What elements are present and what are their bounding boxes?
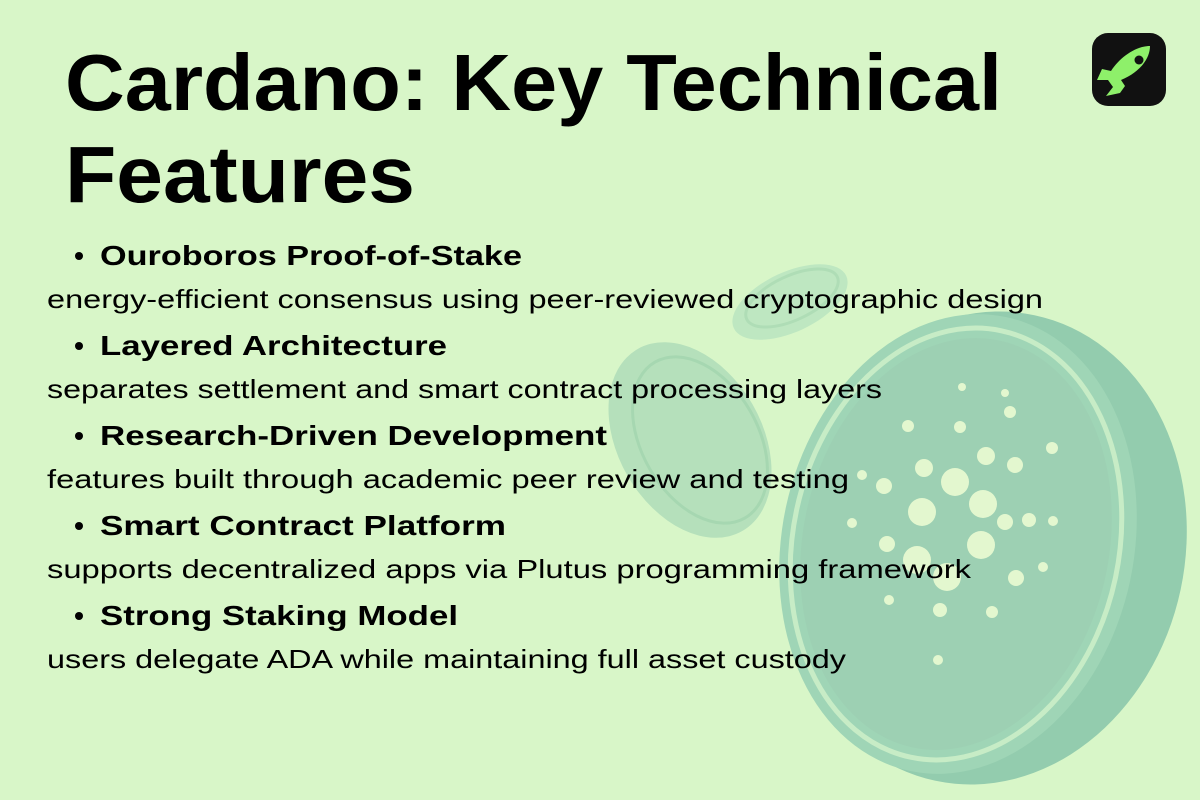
item 5: Strong Staking Model [100, 600, 458, 631]
item 1 [47, 240, 1043, 314]
item 3: features built through academic peer review and testing [47, 464, 849, 494]
logo: rocket icon [1092, 33, 1166, 106]
item 4: supports decentralized apps via Plutus programming framework [47, 554, 972, 584]
item 5: users delegate ADA while maintaining full asset custody [47, 644, 846, 674]
feature list [47, 240, 1043, 674]
background coin: small top [721, 249, 859, 355]
item 4: Smart Contract Platform [100, 510, 506, 541]
item 2: separates settlement and smart contract processing layers [47, 374, 882, 404]
cardano logo dots [847, 383, 1058, 665]
title [65, 38, 1002, 219]
item 2: Layered Architecture [100, 330, 447, 361]
item 1: Ouroboros Proof-of-Stake [100, 240, 522, 271]
item 3: Research-Driven Development [100, 420, 607, 451]
title: Features [65, 130, 415, 219]
item 3 [47, 420, 849, 494]
item 5 [47, 600, 846, 674]
item 1: energy-efficient consensus using peer-reviewed cryptographic design [47, 284, 1043, 314]
main coin [738, 274, 1200, 800]
item 4 [47, 510, 972, 584]
title: Cardano: Key Technical [65, 38, 1002, 127]
item 2 [47, 330, 882, 404]
background coin: middle left [575, 313, 805, 567]
